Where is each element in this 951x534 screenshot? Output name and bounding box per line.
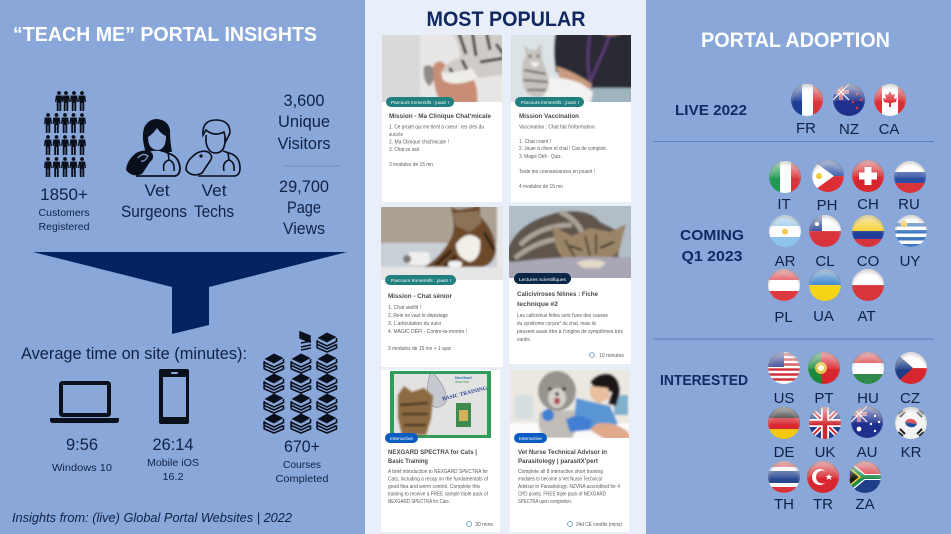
flag: Philippines: PH — [817, 197, 837, 214]
background panel: left — [0, 0, 365, 534]
flag: Colombia — [852, 215, 884, 270]
flag: Germany — [768, 407, 800, 461]
flag: Argentina: AR — [775, 253, 796, 270]
flag: Poland (labelled AT) — [852, 269, 884, 325]
tag pill: Lectures scientifiques — [519, 277, 567, 283]
courses completed stat: Completed — [276, 473, 329, 485]
windows stat: 9:56 — [66, 435, 98, 454]
vet surgeons label: Vet — [144, 182, 170, 200]
card text: Mission Vaccination — [519, 113, 579, 120]
flag: Thailand — [768, 461, 800, 513]
photo: basic training banner — [390, 371, 491, 438]
flag: Switzerland — [852, 160, 884, 213]
tag pill: Parcours Immersifs : jouez ! — [521, 100, 579, 106]
windows stat: Windows 10 — [52, 462, 112, 474]
duration: 30 mins — [475, 522, 494, 528]
card: Ma Clinique Chat'micale — [375, 30, 510, 202]
card text: Mission - Chat sénior — [388, 293, 452, 300]
card text — [517, 291, 623, 343]
card text: Teste tes connaissances en jouant ! — [519, 169, 595, 175]
flag: UK: UK — [815, 444, 835, 461]
customers registered stat: Registered — [38, 221, 90, 233]
card: Calicivirose feline — [500, 200, 640, 364]
flag: Ukraine: UA — [813, 308, 834, 325]
courses completed stat: Courses — [283, 459, 321, 471]
source note: Insights from: (live) Global Portal Websites | 2022 — [12, 511, 292, 525]
card text — [519, 113, 607, 190]
mobile stat: Mobile iOS — [147, 457, 199, 469]
flag: Chile: CL — [815, 253, 835, 270]
card text: modules to become a Vet Nurse Technical — [518, 476, 602, 482]
card text: variés. — [517, 337, 531, 343]
icon: vet tech — [186, 120, 240, 176]
heading: coming Q1 2023: COMING — [680, 227, 744, 244]
flag: Hungary: HU — [857, 390, 879, 407]
tag pill: Interactive — [390, 436, 413, 442]
flag: Philippines — [812, 160, 844, 214]
heading: coming Q1 2023: Q1 2023 — [682, 248, 742, 265]
card: NexGard Spectra for Cats — [381, 370, 500, 532]
page views stat: Views — [283, 219, 325, 238]
card text — [518, 449, 620, 505]
card text: Vet Nurse Technical Advisor in — [518, 449, 607, 456]
flag: Uruguay — [895, 215, 927, 270]
tag pill: Parcours Immersifs : jouez ! — [391, 100, 449, 106]
card text: Cats, including a recap on the fundamentals of — [388, 476, 489, 482]
flag: Italy — [769, 161, 801, 213]
title: portal insights: “TEACH ME” PORTAL INSIGHTS — [13, 23, 317, 46]
vet techs label — [194, 182, 234, 221]
card text: Advisor in Parasitology. NZVNA accredited for 4 — [518, 484, 620, 490]
vet surgeons label — [121, 182, 187, 221]
card text: 2. Jouer à chien et chat ! Cas de comptoir. — [519, 146, 607, 152]
title: most popular: MOST POPULAR — [426, 8, 586, 31]
photo: basic training banner: NexGard — [455, 375, 472, 380]
flag: New Zealand: NZ — [839, 121, 859, 138]
flag: Canada — [874, 84, 906, 138]
card: Chat senior — [375, 200, 510, 367]
background panel: most popular — [365, 0, 646, 534]
tag pill: Parcours Immersifs : jouez ! — [391, 278, 451, 284]
icon: mobile phone — [159, 369, 189, 424]
flag: South Africa: ZA — [855, 496, 875, 513]
title: portal adoption: PORTAL ADOPTION — [701, 29, 890, 52]
duration — [466, 522, 494, 528]
flag: Czech Republic — [895, 352, 927, 407]
card text: 1. Chat craint ! — [519, 139, 551, 145]
flag: Turkey: TR — [813, 496, 833, 513]
heading: live 2022: LIVE 2022 — [675, 102, 747, 119]
flag: Canada: CA — [879, 121, 899, 138]
card text: 2. Rein ne vaut le dépistage — [388, 313, 448, 319]
card text: CPD points. FREE triple pack of NEXGARD — [518, 492, 606, 498]
page views stat: Page — [287, 198, 321, 217]
photo: basic training banner: BASIC TRAINING — [442, 385, 489, 403]
tag pill — [515, 97, 584, 107]
card text: 4. MAGIC DÉFI - Contre-la-montre ! — [388, 328, 467, 335]
flag: Australia — [851, 406, 883, 461]
arrow: funnel — [33, 252, 347, 334]
card text: good flea and worm control. Complete this — [388, 484, 480, 490]
flag: UK — [809, 407, 841, 461]
flag: Russia — [894, 161, 926, 213]
photo: paw on hand — [375, 30, 510, 110]
flag: Poland (labelled AT): AT — [857, 308, 876, 325]
duration — [590, 352, 624, 359]
card text: 1. Chat vieillit ! — [388, 305, 421, 311]
vet surgeons label: Surgeons — [121, 203, 187, 221]
mobile stat: 16.2 — [162, 471, 184, 483]
unique visitors stat — [278, 91, 330, 153]
unique visitors stat: Unique — [278, 112, 330, 131]
flag: USA: US — [774, 390, 794, 407]
flag: Turkey — [807, 461, 839, 513]
flag: Ukraine — [809, 269, 841, 325]
courses completed stat: 670+ — [284, 437, 320, 456]
tag pill — [385, 433, 418, 443]
photo: basic training banner: SPECTRA — [455, 380, 469, 384]
vet techs label: Techs — [194, 203, 234, 221]
card text: SPECTRA upon completion. — [518, 499, 572, 505]
card text — [388, 293, 467, 352]
heading: coming Q1 2023 — [680, 227, 744, 265]
flag: Switzerland: CH — [857, 196, 879, 213]
duration: 10 minutes — [599, 353, 624, 359]
card text: 4 modules de 16 mn — [519, 184, 563, 190]
customers registered stat: 1850+ — [40, 185, 88, 204]
card text: Caliciviroses félines : Fiche — [517, 291, 598, 298]
card text: 1. Ce projet qui me tient à coeur : les clés du — [389, 124, 484, 130]
flag: Russia: RU — [898, 196, 920, 213]
customers registered stat — [38, 185, 90, 233]
card text: training to receive a FREE sample triple pack of — [388, 492, 489, 498]
card text: Basic Training — [388, 458, 428, 465]
tag pill — [385, 275, 456, 285]
icon: stacks of books — [264, 332, 336, 433]
card text: Vaccination : Chat fait l'information. — [519, 124, 596, 130]
flag: Austria (labelled PL) — [768, 269, 800, 326]
background panel: right — [646, 0, 951, 534]
photo: nurse with dog — [505, 365, 635, 443]
card text: peuvent aussi être à l'origine de symptômes très — [517, 329, 623, 335]
card text: du syndrome coryza* du chat, mais ils — [517, 321, 596, 327]
card text: NEXGARD SPECTRA for Cats | — [388, 449, 477, 456]
card text: Parasitology | parasitX'pert — [518, 458, 599, 465]
card text: NEXGARD SPECTRA for Cats. — [388, 499, 450, 505]
card text: 3 modules de 15 mn + 1 quiz — [388, 346, 451, 352]
flag: South Korea — [895, 407, 927, 461]
card text: A brief introduction to NEXGARD SPECTRA for — [388, 469, 488, 475]
duration: 24d CE credits (mins) — [576, 522, 622, 528]
card text — [388, 449, 489, 505]
flag: France: FR — [796, 120, 816, 137]
page views stat — [279, 177, 329, 238]
flag: Thailand: TH — [774, 496, 794, 513]
card text: Complete all 8 interactive short training — [518, 469, 603, 475]
tag pill — [514, 433, 547, 443]
windows stat — [52, 435, 112, 474]
flag: Australia: AU — [857, 444, 877, 461]
flag: South Korea: KR — [901, 444, 922, 461]
flag: Italy: IT — [777, 196, 791, 213]
card text: 2. Ma Clinique chat'micale ! — [389, 140, 449, 146]
photo: sleeping tabby cat — [500, 200, 640, 285]
card text: 3. Chat se sait — [389, 147, 420, 153]
icon: crowd of customers — [44, 91, 86, 177]
customers registered stat: Customers — [38, 207, 90, 219]
card: Mission Vaccination — [505, 30, 640, 202]
flag: Czech Republic: CZ — [900, 390, 920, 407]
tag pill — [386, 97, 454, 107]
card text: 3. L'articulation du suivi — [388, 321, 441, 327]
icon: vet surgeon — [126, 119, 180, 176]
card text: technique #2 — [517, 301, 558, 308]
flag: Uruguay: UY — [900, 253, 920, 270]
heading: interested: INTERESTED — [660, 372, 748, 389]
mobile stat: 26:14 — [152, 435, 194, 454]
card text: 3 modules de 15 mn — [389, 162, 433, 168]
tag pill: Interactive — [519, 436, 542, 442]
flag: France — [791, 84, 823, 137]
unique visitors stat: 3,600 — [284, 91, 324, 110]
flag: Argentina — [769, 215, 801, 270]
tag pill — [514, 273, 571, 284]
flag: Colombia: CO — [857, 253, 879, 270]
icon: laptop — [50, 383, 119, 423]
flag: USA — [768, 352, 800, 407]
courses completed stat — [276, 437, 329, 485]
card text: Les calicivirus félins sont l'une des causes — [517, 313, 608, 319]
card text — [389, 113, 491, 168]
flag: Portugal: PT — [814, 390, 834, 407]
vet techs label: Vet — [202, 182, 227, 200]
flag: Chile — [809, 215, 841, 270]
card: Vet Nurse Technical Advisor — [505, 365, 635, 532]
flag: Portugal — [808, 352, 840, 407]
card text: Mission - Ma Clinique Chat'micale — [389, 113, 491, 120]
card text: 3. Magic Défi - Quiz. — [519, 154, 562, 160]
flag: Hungary — [852, 352, 884, 407]
flag: Germany: DE — [774, 444, 794, 461]
photo: long-haired cat — [375, 200, 510, 282]
card text: succès — [389, 132, 403, 138]
flag: Austria (labelled PL): PL — [774, 309, 793, 326]
unique visitors stat: Visitors — [278, 134, 330, 153]
photo: kitten with vet — [505, 30, 640, 110]
page views stat: 29,700 — [279, 177, 329, 196]
heading: average time on site: Average time on site (minutes): — [21, 344, 247, 363]
flag: New Zealand — [833, 84, 865, 138]
flag: South Africa — [849, 461, 881, 513]
mobile stat — [147, 435, 199, 483]
